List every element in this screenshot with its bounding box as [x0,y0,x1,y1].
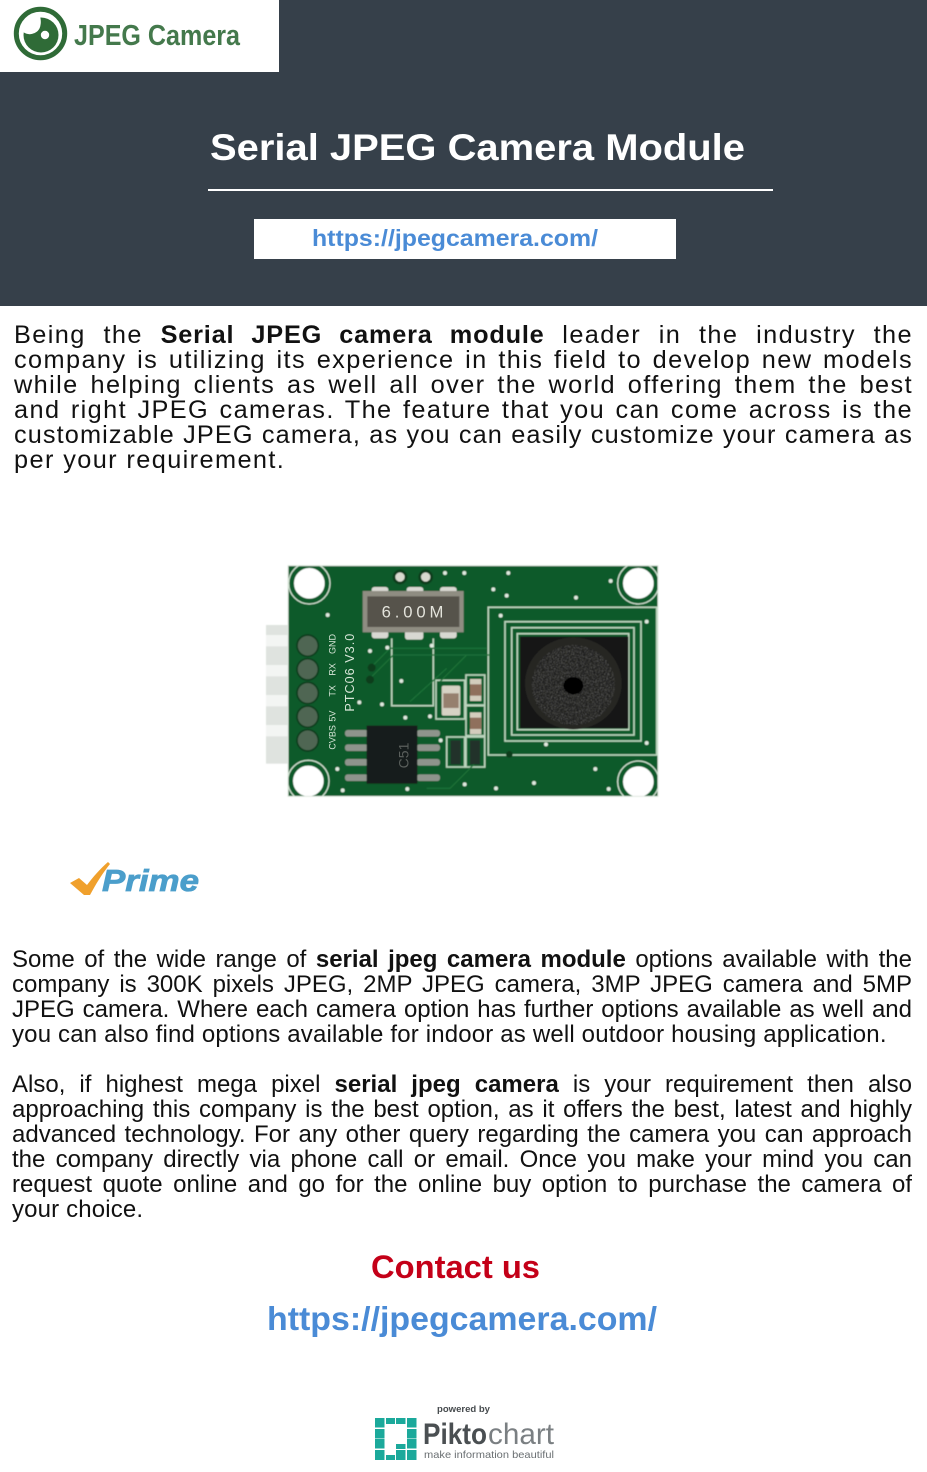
powered by Piktochart [375,1404,555,1461]
pin header pads [297,635,318,751]
intro paragraph [14,323,913,473]
board labels: RX [327,663,337,676]
icon: JPEG Camera logo [14,6,241,60]
pcb outlines [392,607,657,767]
camera module photo [266,565,659,797]
crystal [363,591,464,632]
board labels: TX [327,685,337,697]
powered by Piktochart: chart [488,1418,555,1451]
logo panel [0,0,279,72]
board labels: CVBS [327,725,337,750]
icon: Piktochart mark [375,1418,416,1460]
board labels: C51 [395,742,411,768]
icon: Prime badge [70,862,199,898]
header banner [0,0,927,306]
board labels: PTC06 V3.0 [343,633,357,712]
board [288,566,658,796]
body paragraph: requirement [12,1072,912,1222]
url box: https://jpegcamera.com/ [312,225,599,251]
icon: JPEG Camera logo: JPEG Camera [74,20,241,52]
contact heading: Contact us [371,1249,540,1285]
powered by Piktochart: powered by [437,1404,491,1415]
title: Serial JPEG Camera Module [210,127,745,168]
board labels: 5V [327,711,337,722]
board labels: GND [327,634,337,654]
board labels [327,603,443,768]
chip [345,730,440,781]
mounting holes [288,563,659,802]
connector [266,625,288,764]
body paragraph: options [12,947,912,1047]
powered by Piktochart: Pikto [423,1418,487,1451]
board labels: 6.00M [382,603,443,622]
powered by Piktochart: make information beautiful [424,1449,554,1461]
contact url: https://jpegcamera.com/ [267,1300,657,1337]
components [442,686,460,716]
icon: Prime badge: Prime [102,863,199,898]
crystal pads [394,571,432,583]
board dots [326,571,649,792]
lens [520,637,628,728]
url box [254,219,676,259]
